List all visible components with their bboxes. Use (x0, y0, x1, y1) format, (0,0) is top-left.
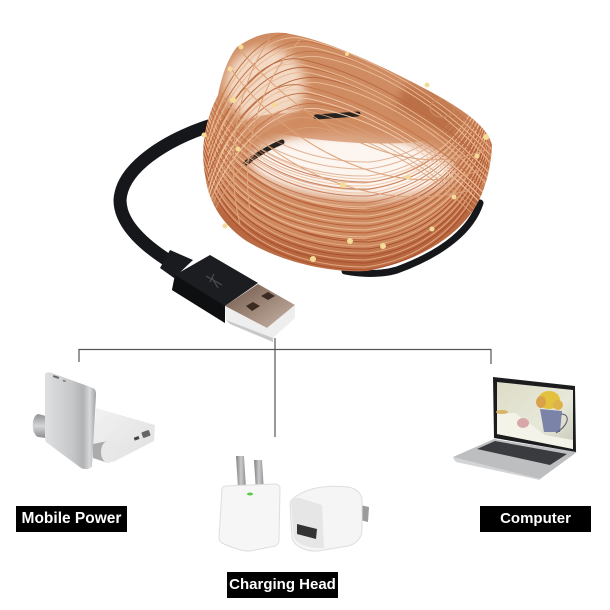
connector lines (79, 338, 491, 437)
small loop at right (430, 99, 454, 117)
upper wires (208, 33, 492, 160)
rear power bank (92, 408, 155, 462)
LED beads (202, 44, 489, 262)
icon: mobile power banks (33, 372, 155, 469)
right charger prong (360, 505, 369, 522)
black connector housing (172, 255, 258, 323)
USB plug (160, 250, 295, 342)
light centre opening (248, 129, 456, 203)
copper coil (203, 32, 492, 272)
label: Mobile Power: Mobile Power (22, 510, 121, 527)
USB symbol (206, 274, 222, 288)
coil base colour (203, 32, 492, 272)
laptop screen lid (493, 377, 576, 452)
metal shell (225, 284, 295, 328)
icon: laptop computer (453, 377, 577, 480)
cable seen through the opening (316, 114, 358, 117)
yellow flowers (538, 391, 560, 409)
mug (540, 409, 562, 432)
laptop base (453, 439, 577, 479)
front power bank (45, 372, 96, 469)
screen image (497, 382, 573, 449)
keyboard (477, 441, 567, 465)
label: Charging Head (227, 572, 338, 598)
dark lower band (212, 190, 480, 262)
label: Charging Head: Charging Head (229, 576, 336, 593)
label: Computer (480, 506, 591, 532)
darker right band (400, 95, 482, 160)
product: copper wire string light with USB cable (120, 25, 500, 342)
label: Mobile Power (16, 506, 127, 532)
cable strain relief (160, 250, 193, 278)
icon: charging heads (219, 456, 369, 551)
sparse upper-left region (225, 47, 305, 123)
right charger body (290, 486, 362, 551)
left charger prongs (236, 456, 246, 488)
lower wires (203, 33, 492, 270)
label: Computer: Computer (500, 510, 571, 527)
left charger body (219, 484, 280, 551)
black cable behind coil (120, 125, 480, 274)
loose crossing wires (225, 38, 485, 225)
